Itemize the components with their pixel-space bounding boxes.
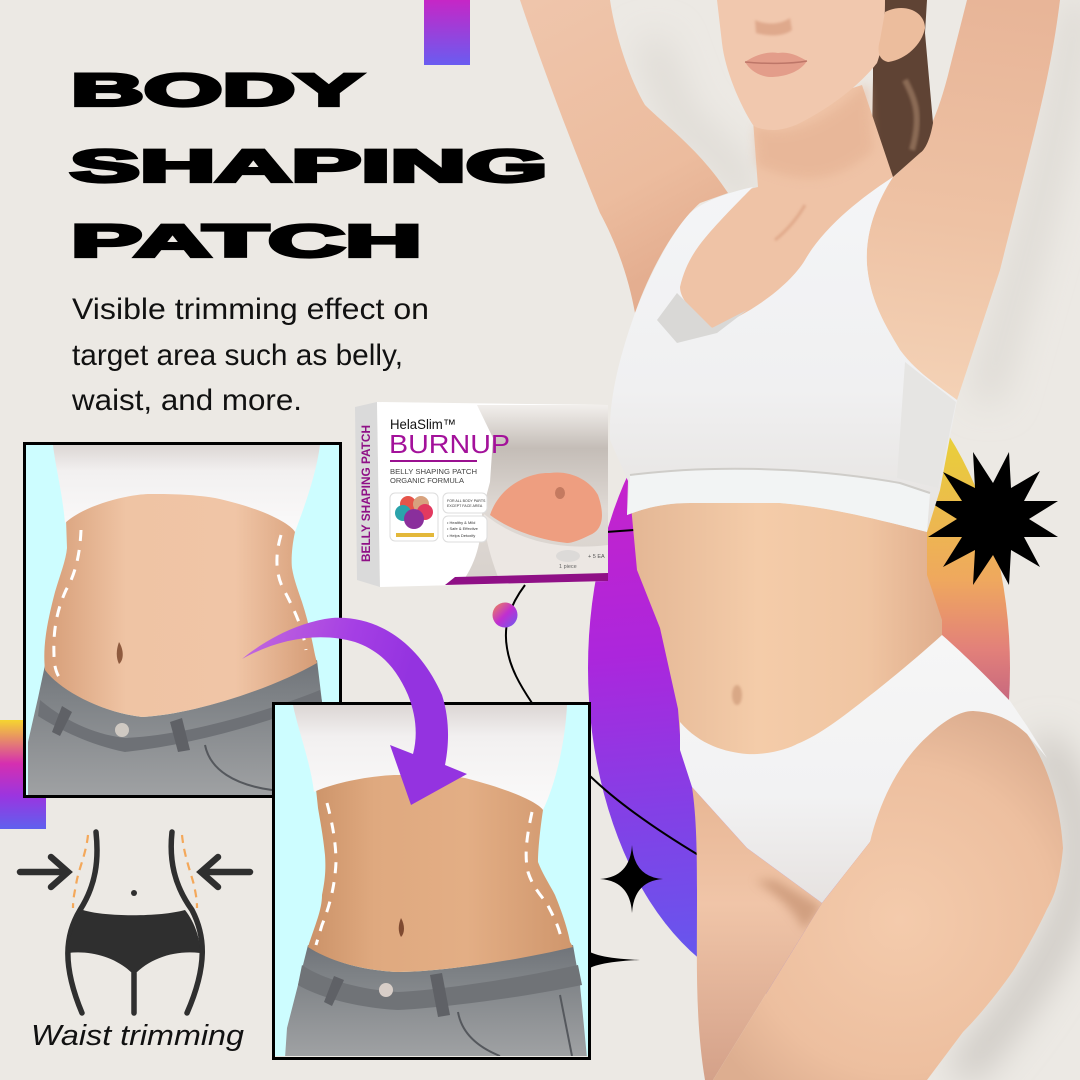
collar shadow [775, 205, 805, 240]
after belt loop right [430, 973, 450, 1017]
info card two: • Healthy & Mild [447, 520, 475, 525]
left arrow [20, 857, 68, 887]
navel [732, 685, 742, 705]
info card one: EXCEPT FACE AREA [447, 504, 483, 508]
ear [879, 8, 925, 62]
right arm [867, 0, 1060, 400]
torso [630, 495, 942, 765]
title: SHAPING [70, 141, 547, 191]
face [717, 0, 885, 130]
lips [745, 52, 807, 77]
before jeans [28, 660, 324, 798]
piece count: 1 piece [559, 564, 577, 570]
body outline [68, 832, 202, 1013]
ponytail hair [872, 0, 933, 177]
after jeans button [379, 983, 393, 997]
after photo [274, 704, 590, 1058]
info card two: • Helps Detoxify [447, 533, 475, 538]
hair highlight [905, 80, 917, 150]
brand name: HelaSlim™ [390, 416, 456, 432]
small sparkle behind after photo [585, 948, 640, 972]
box bottom stripe [445, 573, 608, 585]
subtitle: BELLY SHAPING PATCH [390, 467, 477, 476]
before jeans button [115, 723, 129, 737]
patch on box [490, 472, 602, 543]
ingredients card [390, 493, 438, 541]
white underwear [680, 635, 1047, 903]
bra side panel [897, 362, 956, 488]
right arrow [201, 857, 250, 887]
before dashed outlines [54, 530, 306, 677]
info card two: • Safe & Effective [447, 526, 479, 531]
black starburst [928, 452, 1058, 585]
before photo border [24, 444, 340, 796]
product name: BURNUP [389, 429, 510, 459]
after jeans pocket [458, 995, 572, 1056]
after jeans waistband [298, 965, 582, 1010]
before jeans waistband [38, 690, 322, 752]
box side panel [355, 402, 380, 587]
before navel [117, 642, 123, 664]
description text: target area such as belly, [72, 339, 403, 372]
after navel [399, 918, 404, 937]
before photo background [26, 445, 340, 795]
rear leg [692, 787, 822, 1080]
neck and chest [670, 85, 893, 340]
black briefs [68, 910, 200, 975]
piece count [556, 550, 605, 570]
before white top [53, 445, 320, 532]
before belly [44, 490, 317, 717]
after belly [308, 770, 573, 972]
box front [377, 402, 608, 587]
model cast shadow [650, 0, 1079, 1075]
side text: BELLY SHAPING PATCH [361, 425, 373, 562]
title: BODY [71, 65, 363, 115]
after photo background [275, 705, 588, 1056]
before photo [24, 444, 340, 798]
product box [355, 402, 608, 587]
lip line [745, 61, 807, 63]
box navel [555, 487, 565, 499]
subtitle: ORGANIC FORMULA [390, 476, 465, 485]
box underwear [484, 514, 608, 577]
description text: Visible trimming effect on [72, 293, 429, 326]
gradient oval behind model [588, 438, 1010, 994]
box model torso [465, 405, 608, 578]
sparkle star [600, 845, 663, 913]
thin black curve line [506, 530, 700, 856]
before belt loop left [52, 706, 72, 736]
navel dot [131, 890, 137, 896]
hem seam [630, 469, 930, 493]
after photo border [274, 704, 590, 1058]
top gradient rectangle [424, 0, 470, 65]
model [520, 0, 1063, 1080]
subtitle [390, 467, 477, 485]
piece count: + 5 EA [588, 554, 605, 560]
front thigh [713, 711, 1063, 1080]
waist trimming icon [20, 832, 250, 1052]
after jeans [285, 945, 587, 1058]
description text [71, 293, 429, 417]
purple curved arrow [242, 618, 467, 805]
info card two [443, 516, 487, 542]
decorative ball [492, 602, 518, 628]
white bra [610, 177, 957, 532]
under chin shadow [755, 82, 873, 178]
after belt loop left [324, 976, 344, 1006]
info card one: FOR ALL BODY PARTS [447, 499, 486, 503]
title: PATCH [71, 216, 422, 266]
before jeans pocket [205, 745, 272, 790]
after dashed outlines [316, 803, 561, 945]
after white top [293, 705, 567, 810]
left arm [520, 0, 728, 313]
nose [755, 18, 792, 35]
divider [390, 460, 477, 462]
info card one [443, 493, 487, 513]
crease shadow [755, 880, 822, 930]
bra sheer panel [657, 293, 747, 343]
orange dashes [73, 835, 197, 908]
icon caption: Waist trimming [31, 1020, 244, 1052]
title [70, 65, 547, 266]
bra hem band [627, 469, 930, 532]
description text: waist, and more. [71, 384, 302, 417]
left gradient rectangle [0, 720, 46, 829]
before belt loop right [170, 718, 190, 752]
